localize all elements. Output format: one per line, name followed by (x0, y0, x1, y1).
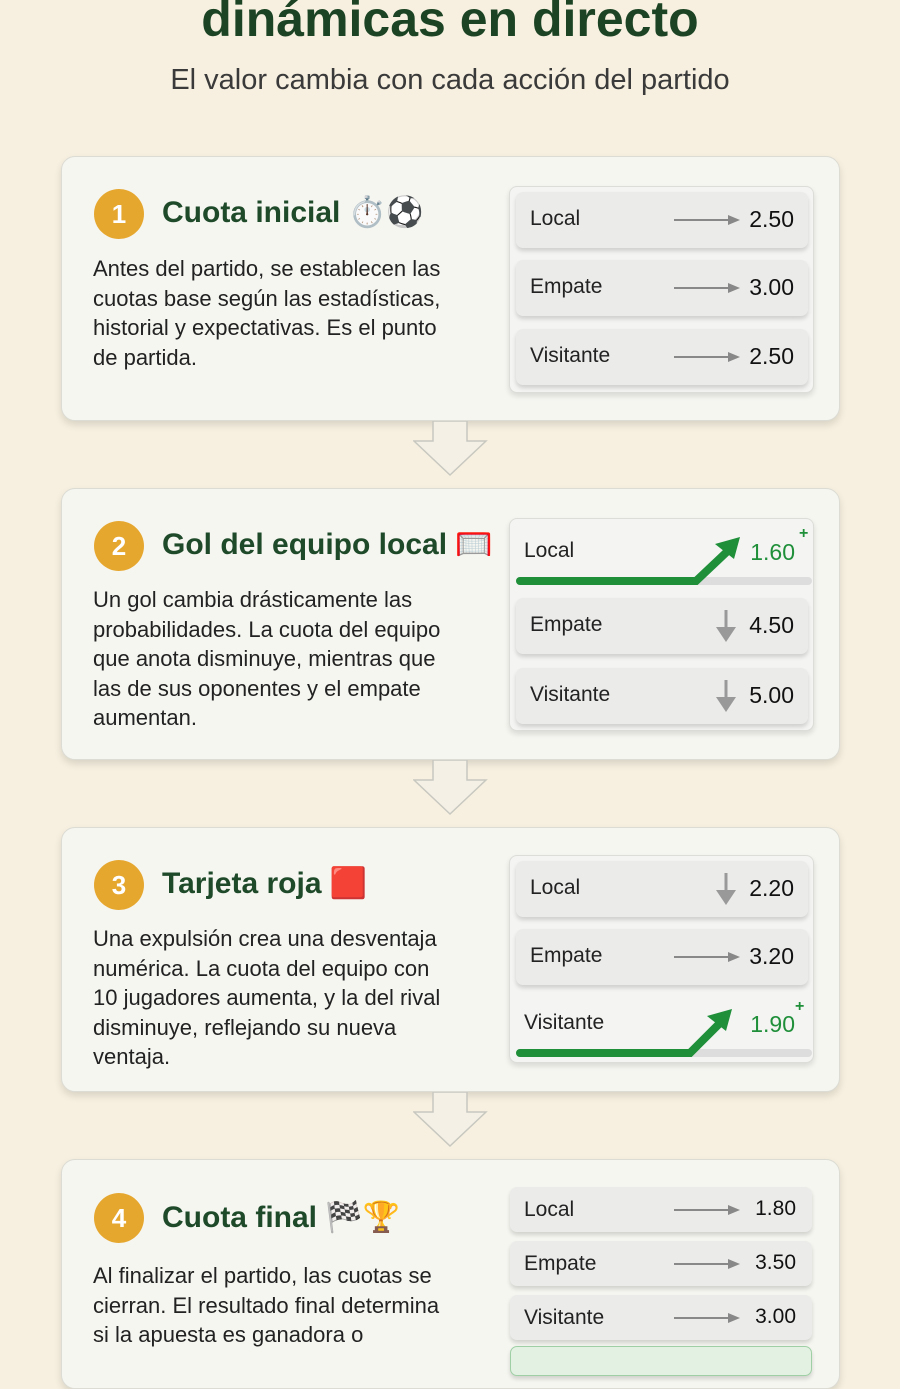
odds panel 2: 4.50 (749, 612, 794, 638)
badge 2 (94, 521, 144, 571)
text 3: Una expulsión crea una desventaja numérica. La cuota del equipo con 10 jugadores aumenta, y la del rival disminuye, reflejando su nueva ventaja. (93, 926, 440, 1069)
visitante up: 1.90 (750, 1011, 795, 1037)
odds panel 3 (509, 855, 814, 1063)
local up (516, 525, 812, 585)
visitante up (516, 998, 812, 1057)
arrow 1 (413, 421, 488, 476)
text 2: Un gol cambia drásticamente las probabilidades. La cuota del equipo que anota disminuye, mientras que las de sus oponentes y el empate aumentan. (93, 587, 440, 730)
text 4: Al finalizar el partido, las cuotas se cierran. El resultado final determina si la apuesta es ganadora o (93, 1263, 439, 1347)
odds panel 2: Empate (530, 613, 602, 636)
panel: card 3 (61, 827, 840, 1092)
arrow 3 (413, 1092, 488, 1147)
odds panel 3: Empate (530, 944, 602, 967)
badge 2: 2 (112, 531, 126, 561)
odds rows 4: 3.00 (755, 1305, 796, 1328)
heading 2: Gol del equipo local 🥅 (162, 528, 493, 561)
odds panel 3: 3.20 (749, 943, 794, 969)
odds panel 1: 3.00 (749, 274, 794, 300)
local up: 1.60 (750, 539, 795, 565)
odds panel 2: Visitante (530, 683, 610, 706)
local up: Local (524, 539, 574, 562)
badge 3 (94, 860, 144, 910)
badge 4 (94, 1193, 144, 1243)
heading 1: Cuota inicial ⏱️⚽ (162, 196, 423, 229)
arrow 2 (413, 760, 488, 815)
panel: card 1 (61, 156, 840, 421)
odds panel 3: Local (530, 876, 580, 899)
odds rows 4: 3.50 (755, 1251, 796, 1274)
badge 3: 3 (112, 870, 126, 900)
text 1: Antes del partido, se establecen las cuotas base según las estadísticas, historial y expectativas. Es el punto de partida. (93, 256, 440, 370)
odds panel 1: 2.50 (749, 343, 794, 369)
visitante up: Visitante (524, 1011, 604, 1034)
panel: card 2 (61, 488, 840, 760)
odds rows 4 (508, 1187, 814, 1380)
odds panel 2: 5.00 (749, 682, 794, 708)
badge 1 (94, 189, 144, 239)
odds panel 1: Visitante (530, 344, 610, 367)
odds rows 4: 1.80 (755, 1197, 796, 1220)
subtitle: El valor cambia con cada acción del partido (170, 64, 730, 96)
heading 3: Tarjeta roja 🟥 (162, 867, 367, 900)
odds panel 2 (509, 518, 814, 731)
odds panel 3: 2.20 (749, 875, 794, 901)
odds panel 1: Local (530, 207, 580, 230)
odds rows 4: Visitante (524, 1306, 604, 1329)
badge 1: 1 (112, 199, 126, 229)
local up: + (799, 525, 808, 542)
visitante up: + (795, 998, 804, 1015)
panel: card 4 (61, 1159, 840, 1389)
odds panel 1: Empate (530, 275, 602, 298)
heading 4: Cuota final 🏁🏆 (162, 1201, 400, 1234)
badge 4: 4 (112, 1203, 126, 1233)
odds rows 4: Empate (524, 1252, 596, 1275)
odds panel 1 (509, 186, 814, 393)
odds panel 1: 2.50 (749, 206, 794, 232)
odds rows 4: Local (524, 1198, 574, 1221)
